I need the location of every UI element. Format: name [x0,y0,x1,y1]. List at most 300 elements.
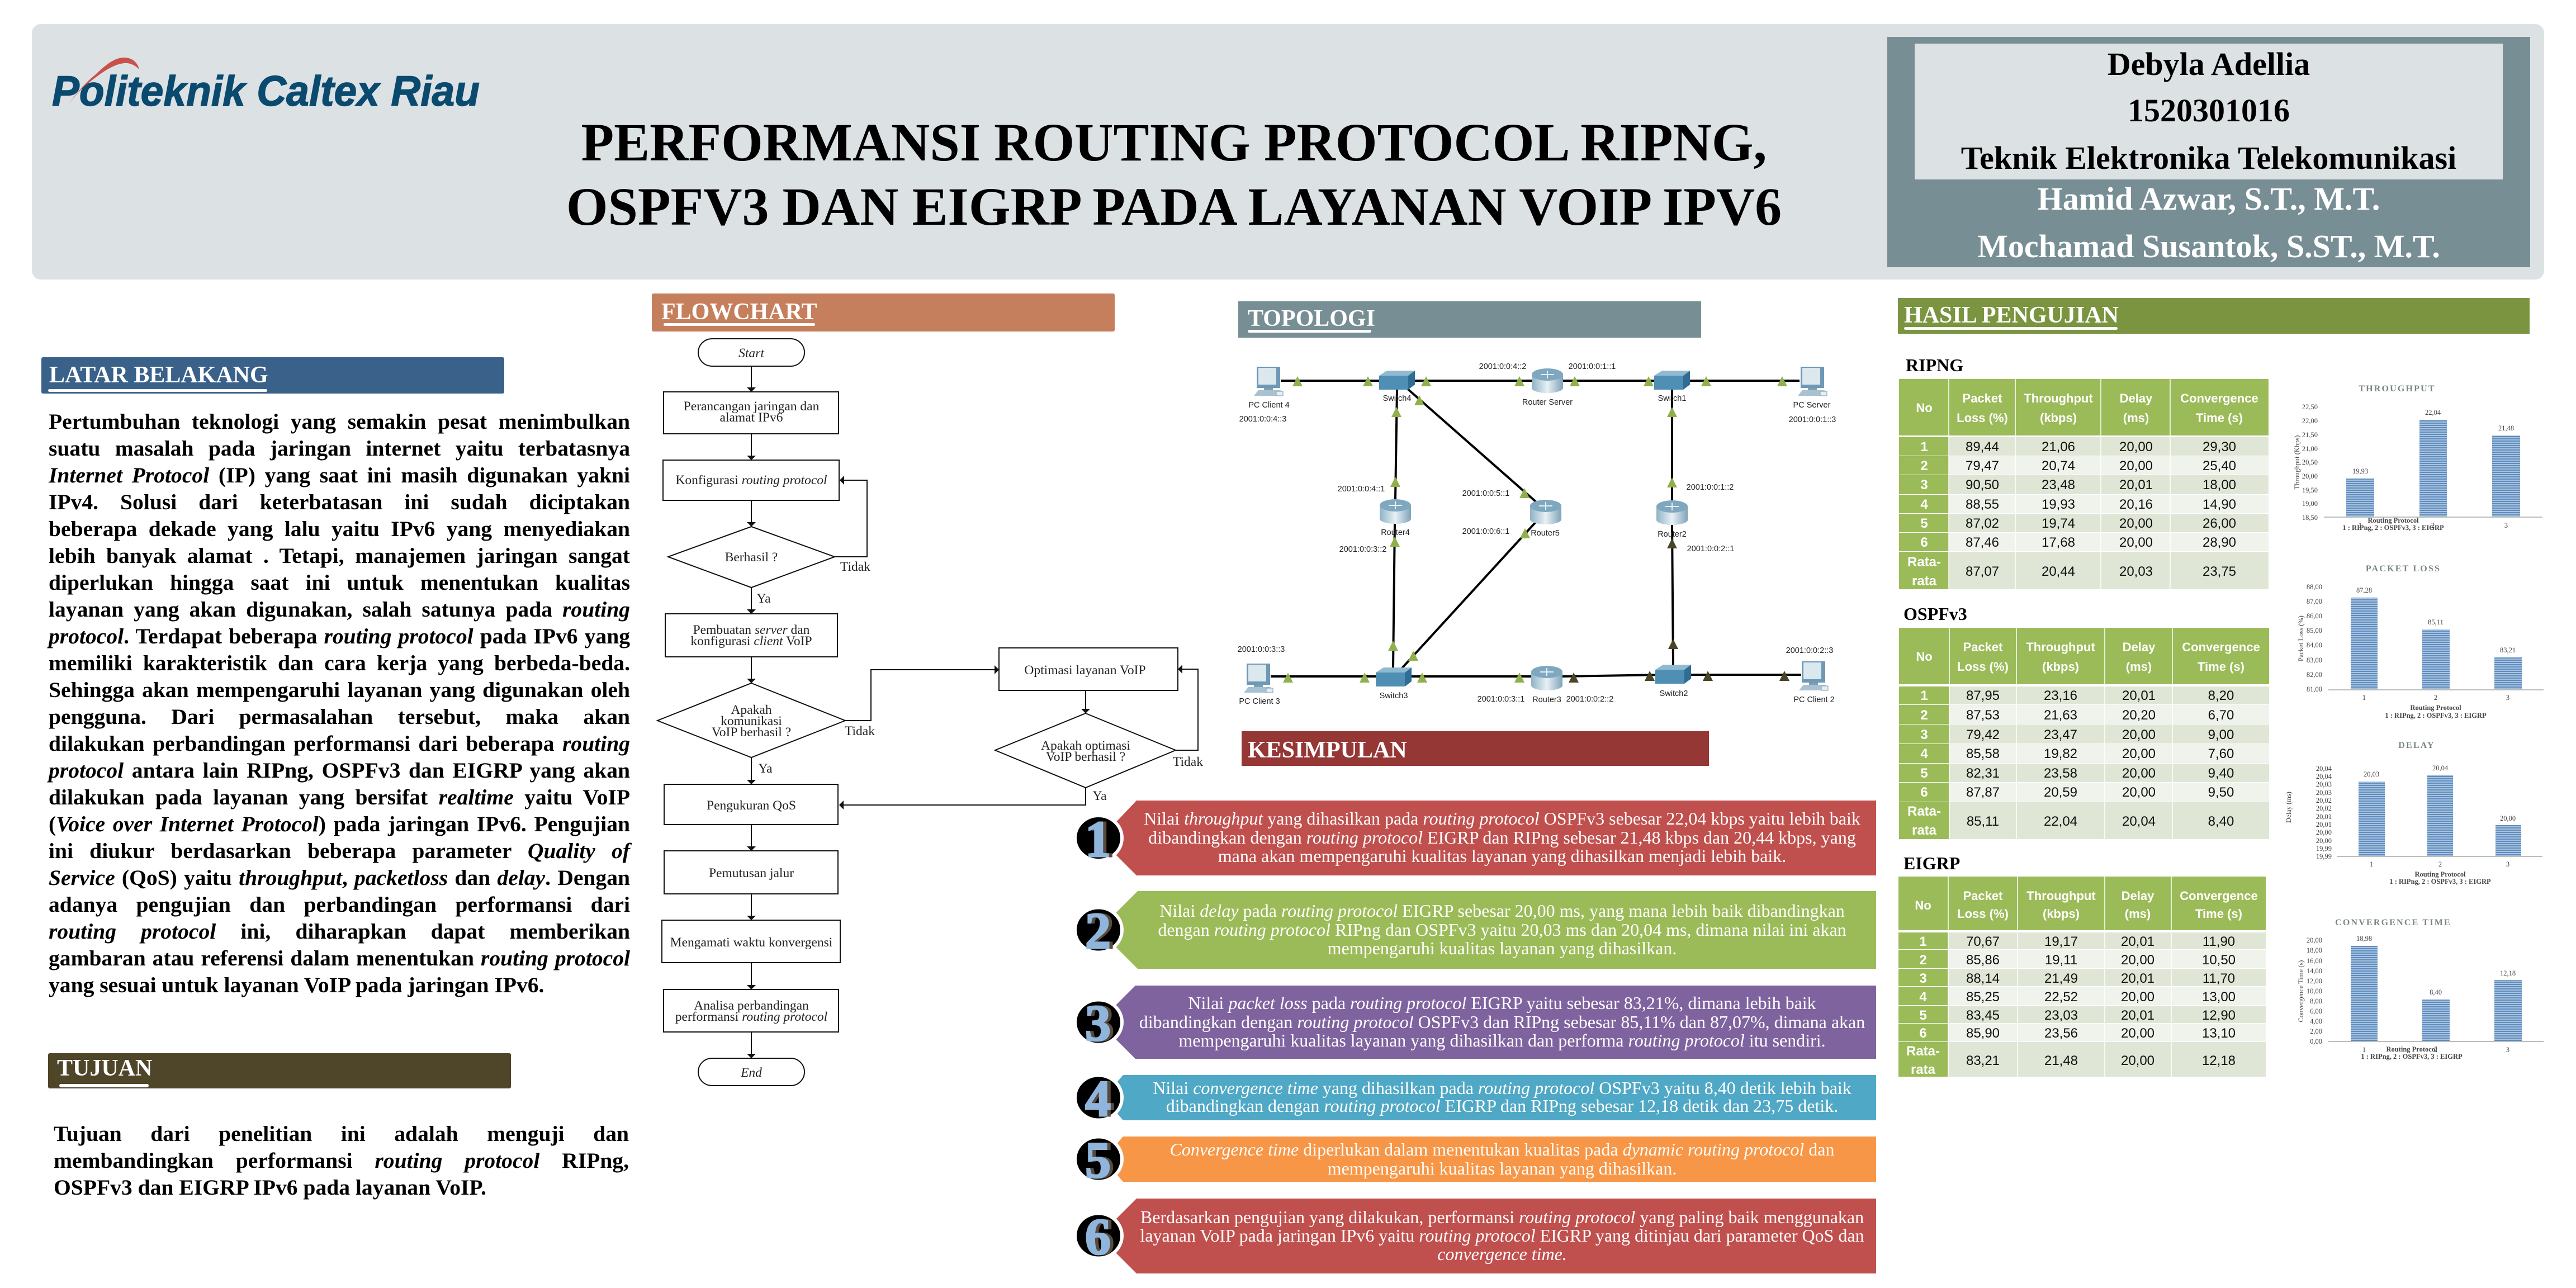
device and address labels: 2001:0:0:1::2 [1687,483,1734,492]
text block: latar belakang: lebih banyak alamat . Tetapi, manajemen jaringan sangat [49,543,630,568]
y axis ticks: 6,00 [2310,1007,2322,1015]
conclusion 5: mempengaruhi kualitas layanan yang dihasilkan. [1328,1158,1677,1178]
x axis [2328,689,2544,690]
table text: 87,07 [1966,564,1999,579]
table text: Time (s) [2198,660,2244,674]
table text: Time (s) [2196,411,2243,425]
y axis ticks: 88,00 [2307,583,2322,591]
arrow: mengamati to analisa [751,963,752,985]
arrow: optimasi to decision [1085,690,1086,709]
x labels and axis caption: 2 [2434,694,2437,702]
value labels [2364,764,2516,822]
conclusion 6: 6 [1085,1208,1111,1265]
author and supervisor names: Hamid Azwar, S.T., M.T. [2038,181,2380,217]
conclusion 5: 5 [1085,1131,1111,1188]
conclusion 4: 4 [1085,1070,1111,1127]
table text: 87,02 [1966,516,1999,531]
y axis ticks: 19,50 [2302,486,2318,494]
author and supervisor names: Debyla Adellia [2108,46,2310,82]
table title: EIGRP [1903,853,1960,873]
value labels: 20,03 [2364,770,2379,778]
value labels: 22,04 [2425,409,2441,416]
table text: 20,00 [2121,1026,2154,1041]
table text: 17,68 [2042,535,2075,550]
device and address labels: Switch4 [1383,394,1411,403]
value labels: 18,98 [2356,935,2372,943]
table text: rata [1912,823,1937,838]
table text: 18,00 [2203,477,2236,493]
chart title: DELAY [2398,741,2435,750]
node: pemutusan jalur: Pemutusan jalur [709,866,794,880]
table text: 6,70 [2208,708,2234,723]
table text: 20,01 [2122,688,2156,703]
bars [2346,420,2520,517]
table text [1907,640,2260,838]
table text: (ms) [2125,907,2151,921]
arrow: qos to pemutusan [751,825,752,846]
table text: 20,00 [2119,439,2153,454]
device and address labels: Switch2 [1660,689,1688,698]
arrow: ya to pengukuran [751,757,752,780]
heading: tujuan: TUJUAN [57,1055,152,1081]
table text: 87,95 [1966,688,2000,703]
table text: 85,25 [1966,989,2000,1005]
arrow: ya to server setup [751,588,752,609]
table text: Rata- [1907,555,1941,570]
table text: 1 [1919,934,1927,949]
table text: 70,67 [1966,934,2000,949]
x axis [2337,856,2542,857]
decision: berhasil [668,527,835,588]
table text: 9,00 [2208,727,2234,742]
x labels and axis caption [2342,517,2508,532]
x axis [2328,1041,2544,1042]
conclusion 6: Berdasarkan pengujian yang dilakukan, performansi routing protocol yang paling baik menggunakan [1140,1207,1864,1227]
device and address labels: Switch1 [1658,394,1686,403]
node: konfigurasi routing protocol [663,460,839,500]
node: analisa perbandingan [664,989,839,1032]
table text: rata [1911,1062,1936,1077]
table text: 85,58 [1966,746,2000,761]
arrow: tidak loop to optimasi [1176,669,1198,750]
conclusion 4 [1075,1070,1876,1127]
device and address labels: PC Client 4 [1248,401,1290,410]
table text: Loss (%) [1957,411,2008,425]
y axis ticks: 20,00 [2316,828,2332,836]
y axis ticks: 22,50 [2302,403,2318,411]
table text: Packet [1963,889,2003,903]
table text: Loss (%) [1957,907,2009,921]
node: analisa perbandingan: performansi routing protocol [675,1010,828,1024]
network topology diagram [1238,362,1836,706]
label: tidak: Tidak [845,724,875,738]
text block: tujuan [54,1121,629,1200]
y axis title: Throughput (Kbps) [2293,435,2301,489]
conclusion 5: Convergence time diperlukan dalam menentukan kualitas pada dynamic routing protocol dan [1170,1139,1834,1159]
conclusion ribbons [1075,801,1876,1273]
table text: 20,03 [2119,564,2153,579]
node: pembuatan server [665,614,837,657]
decision: optimasi voip berhasil [995,713,1176,788]
table text: Throughput [2026,889,2096,903]
device and address labels [1238,362,1836,706]
y axis ticks: 19,00 [2302,500,2318,508]
chart title: PACKET LOSS [2366,564,2441,574]
table text: 3 [1920,727,1928,742]
node: pembuatan server: konfigurasi client VoIP [690,634,812,648]
table text: 26,00 [2203,516,2236,531]
table text: 2 [1919,953,1927,968]
table text: 2 [1920,458,1928,473]
table text: Rata- [1906,1044,1940,1059]
chart title: CONVERGENCE TIME [2335,918,2451,927]
table text: 85,90 [1966,1026,2000,1041]
arrow: pemutusan to mengamati [751,894,752,916]
table text: 20,00 [2121,989,2154,1005]
y axis ticks: 84,00 [2307,641,2322,649]
text block: tujuan: membandingkan performansi routing protocol RIPng, [54,1148,629,1173]
table text: 20,44 [2042,564,2075,579]
text block: latar belakang: yang sesuai untuk layanan VoIP pada jaringan IPv6. [49,973,544,997]
device and address labels: 2001:0:0:4::3 [1239,415,1286,424]
arrow: start to design [751,366,752,387]
conclusion 2: mempengaruhi kualitas layanan yang dihasilkan. [1328,938,1677,958]
table text: 29,30 [2203,439,2236,454]
table text: 20,00 [2122,727,2156,742]
author inner panel [1915,44,2503,179]
table text: 89,44 [1966,439,1999,454]
conclusion 1: mana akan mempengaruhi kualitas layanan yang dihasilkan menjadi lebih baik. [1218,846,1786,866]
header panel [32,24,2544,280]
chart: delay [2285,741,2542,886]
y axis ticks: 20,03 [2316,780,2332,788]
x labels and axis caption: 1 : RIPng, 2 : OSPFv3, 3 : EIGRP [2385,712,2487,719]
conclusion 4: 4 [1088,1070,1114,1127]
x labels and axis caption [2370,860,2509,886]
node: start [698,339,804,366]
table: EIGRP [1898,853,2266,1077]
device and address labels: 2001:0:0:1::1 [1569,362,1616,371]
table text: Convergence [2180,391,2258,405]
decision: optimasi voip berhasil: VoIP berhasil ? [1046,750,1125,764]
table text: Delay [2120,391,2153,405]
device and address labels: PC Client 2 [1793,695,1835,704]
table text: 13,10 [2202,1026,2236,1041]
text block: latar belakang: routing protocol ini, diharapkan dapat memberikan [49,919,630,944]
table text: 5 [1920,766,1928,781]
value labels: 19,93 [2352,467,2368,475]
device icons [1244,367,1828,693]
conclusion 3: 3 [1088,995,1114,1052]
text block: latar belakang: adanya pengujian dan perbandingan performansi dari [49,892,630,917]
table text: 21,63 [2044,708,2077,723]
table text: 14,90 [2203,497,2236,512]
x labels and axis caption: 2 [2434,1046,2437,1054]
table text [1907,391,2258,589]
decision: komunikasi voip berhasil: komunikasi [721,714,782,728]
table text: 20,00 [2122,766,2156,781]
node: mengamati waktu konvergensi: Mengamati waktu konvergensi [670,935,833,950]
table text: 3 [1920,477,1928,493]
y axis ticks: 85,00 [2307,627,2322,634]
table text: Convergence [2180,889,2258,903]
conclusion 3: Nilai packet loss pada routing protocol EIGRP yaitu sebesar 83,21%, dimana lebih baik [1188,993,1816,1013]
table text: 85,86 [1966,953,2000,968]
device and address labels: 2001:0:0:3::3 [1238,645,1285,654]
table text: Throughput [2026,640,2095,654]
table text: No [1916,401,1933,415]
y axis ticks: 2,00 [2310,1027,2322,1035]
y axis ticks: 10,00 [2307,987,2322,995]
arrow: design to configuration [751,434,752,456]
x labels and axis caption: 1 : RIPng, 2 : OSPFv3, 3 : EIGRP [2361,1053,2463,1060]
conclusion 6: 6 [1088,1208,1114,1265]
heading: topologi [1238,301,1701,338]
table text: 23,47 [2044,727,2077,742]
table text: 79,47 [1966,458,1999,473]
author and supervisor names: Teknik Elektronika Telekomunikasi [1961,140,2456,176]
device and address labels: 2001:0:0:2::3 [1786,646,1833,655]
y axis ticks: 4,00 [2310,1017,2322,1025]
table text: 19,74 [2042,516,2075,531]
heading: topologi: TOPOLOGI [1248,306,1375,332]
table text: 23,75 [2203,564,2236,579]
table text: rata [1912,574,1937,589]
conclusion 6: convergence time. [1437,1244,1567,1264]
table text: 20,01 [2121,971,2154,986]
text block: latar belakang: gambaran atau referensi dalam menentukan routing protocol [49,946,630,970]
table text: 6 [1920,535,1928,550]
node: perancangan jaringan: Perancangan jaringan dan [684,399,820,414]
y axis ticks: 20,04 [2316,773,2332,780]
flowchart [657,339,1203,1086]
y axis ticks: 20,01 [2316,821,2332,828]
y axis ticks: 21,50 [2302,431,2318,439]
conclusion 3: dibandingkan dengan routing protocol OSPFv3 dan RIPng sebesar 85,11% dan 87,07%, dimana akan [1139,1012,1865,1032]
table text: 4 [1920,497,1928,512]
device and address labels: PC Client 3 [1239,697,1280,706]
y axis ticks: 16,00 [2307,957,2322,965]
table text: 20,01 [2119,477,2153,493]
node: optimasi layanan voip: Optimasi layanan VoIP [1024,663,1146,678]
table text: (kbps) [2042,660,2079,674]
table text: 87,46 [1966,535,1999,550]
text block: latar belakang: Pertumbuhan teknologi yang semakin pesat menimbulkan [49,409,630,434]
y axis ticks: 20,00 [2302,472,2318,480]
value labels [2352,409,2514,475]
arrowheads [747,387,1182,1058]
y axis ticks: 0,00 [2310,1038,2322,1045]
node: optimasi layanan voip [999,648,1178,690]
decision: komunikasi voip berhasil [657,683,845,757]
table text: 20,16 [2119,497,2153,512]
device and address labels: Router3 [1532,695,1561,704]
x labels and axis caption: 1 [2359,522,2362,529]
value labels: 12,18 [2500,969,2516,977]
table title: OSPFv3 [1903,604,1967,624]
y axis ticks: 86,00 [2307,612,2322,620]
table text: 83,45 [1966,1008,2000,1023]
value labels: 8,40 [2430,988,2442,996]
table text: 6 [1919,1026,1927,1041]
table text: 11,70 [2203,971,2235,986]
table text: 19,82 [2044,746,2077,761]
text block: latar belakang: pengguna. Dari permasalahan tersebut, maka akan [49,704,630,729]
y axis title: Packet Loss (%) [2297,615,2305,661]
table text: 20,00 [2121,953,2154,968]
text block: latar belakang: (Voice over Internet Protocol) pada jaringan IPv6. Pengujian [49,812,630,836]
value labels: 87,28 [2356,586,2372,594]
device and address labels: 2001:0:0:2::2 [1566,695,1613,704]
y axis ticks [2307,583,2322,693]
text block: tujuan: OSPFv3 dan EIGRP IPv6 pada layanan VoIP. [54,1175,486,1200]
table text: 5 [1920,516,1928,531]
chart: convergence time [2297,918,2544,1060]
conclusion 4: dibandingkan dengan routing protocol EIGRP dan RIPng sebesar 12,18 detik dan 23,75 detik. [1166,1096,1838,1116]
y axis ticks: 82,00 [2307,671,2322,679]
table text: 10,50 [2202,953,2236,968]
table text: 87,53 [1966,708,2000,723]
device and address labels: PC Server [1793,401,1831,410]
table text: Throughput [2024,391,2093,405]
table text: 20,00 [2122,785,2156,800]
table text: 2 [1920,708,1928,723]
conclusion 5 [1075,1131,1876,1188]
conclusion 3 [1075,986,1876,1059]
table text: Delay [2122,889,2154,903]
table text: 1 [1920,439,1928,454]
y axis ticks: 14,00 [2307,967,2322,975]
value labels: 83,21 [2500,646,2516,654]
y axis ticks: 20,03 [2316,789,2332,797]
arrow: tidak loop back [835,480,867,557]
table text: 20,04 [2122,814,2156,829]
table text: 23,16 [2044,688,2077,703]
arrow: server setup to decision [751,657,752,679]
table text: Loss (%) [1957,660,2009,674]
device and address labels: Router4 [1381,528,1410,537]
value labels: 21,48 [2498,424,2514,432]
y axis ticks: 12,00 [2307,977,2322,985]
table text: 12,90 [2202,1008,2236,1023]
text block: latar belakang: beberapa dekade yang lalu yaitu IPv6 yang menyediakan [49,517,630,541]
table text: 22,52 [2044,989,2078,1005]
y axis ticks: 20,01 [2316,813,2332,821]
text block: latar belakang: protocol. Terdapat beberapa routing protocol pada IPv6 yang [49,624,630,648]
author and supervisor names: Mochamad Susantok, S.ST., M.T. [1977,228,2440,264]
table text: Delay [2123,640,2156,654]
heading: kesimpulan [1242,731,1709,766]
table text: Time (s) [2195,907,2242,921]
conclusion 2: 2 [1085,902,1111,959]
table text: 88,55 [1966,497,1999,512]
table text: 7,60 [2208,746,2234,761]
table text: 23,48 [2042,477,2075,493]
heading: latar belakang [41,357,504,394]
label: ya: Ya [1092,789,1107,803]
device and address labels: 2001:0:0:3::1 [1478,695,1524,704]
conclusion 3: mempengaruhi kualitas layanan yang dihasilkan dan performa routing protocol itu sendiri. [1178,1030,1826,1050]
device and address labels: 2001:0:0:4::1 [1338,485,1385,494]
device and address labels: 2001:0:0:6::1 [1462,527,1509,536]
x labels and axis caption [2361,1045,2509,1060]
conclusion 4: Nilai convergence time yang dihasilkan pada routing protocol OSPFv3 yaitu 8,40 detik lebih baik [1153,1078,1852,1098]
table text: 13,00 [2202,989,2236,1005]
arrow: analisa to end [751,1032,752,1054]
table text: 87,87 [1966,785,2000,800]
x labels and axis caption: 1 [2370,860,2373,868]
table text: 21,06 [2042,439,2075,454]
table text: 20,01 [2121,934,2154,949]
y axis ticks: 20,50 [2302,458,2318,466]
table cells [1898,877,2266,1077]
text block: latar belakang: ini diukur berdasarkan beberapa parameter Quality of [49,839,630,863]
y axis ticks: 20,02 [2316,797,2332,804]
text block: latar belakang: diperlukan hingga saat ini untuk menentukan kualitas [49,570,630,595]
text block: latar belakang: Internet Protocol (IP) yang saat ini masih digunakan yakni [49,463,630,487]
decision: berhasil: Berhasil ? [725,550,778,565]
text block: latar belakang: Service (QoS) yaitu throughput, packetloss dan delay. Dengan [49,865,630,890]
value labels: 20,04 [2432,764,2449,772]
text block: latar belakang: suatu masalah pada jaringan internet yaitu terbatasnya [49,436,630,461]
y axis ticks: 20,04 [2316,765,2332,773]
table text: 20,59 [2044,785,2077,800]
device and address labels: Router Server [1522,398,1573,407]
table text: 3 [1919,971,1927,986]
table text: 23,03 [2044,1008,2078,1023]
label: ya: Ya [758,761,773,776]
node: konfigurasi routing protocol: Konfigurasi routing protocol [675,473,827,487]
title: PERFORMANSI ROUTING PROTOCOL RIPNG, [581,112,1767,172]
table text: 5 [1919,1008,1927,1023]
table text: No [1916,650,1933,664]
author and supervisor names: 1520301016 [2128,92,2290,129]
heading: flowchart: FLOWCHART [661,299,817,325]
y axis ticks: 21,00 [2302,445,2318,453]
table text: (kbps) [2043,907,2080,921]
table text: Packet [1963,640,2003,654]
x labels and axis caption: 1 [2362,694,2366,702]
conclusion 5: 5 [1088,1131,1114,1188]
x labels and axis caption: 2 [2438,860,2442,868]
x labels and axis caption: 3 [2504,522,2508,529]
x labels and axis caption: Routing Protocol [2367,517,2419,524]
y axis ticks: 8,00 [2310,997,2322,1005]
author and supervisor names [1961,46,2456,264]
arrow: ya to pengukuran qos [844,788,1086,805]
table text: 28,90 [2203,535,2236,550]
heading: latar belakang: LATAR BELAKANG [49,362,268,388]
text block: latar belakang [47,409,632,997]
table text: 90,50 [1966,477,1999,493]
conclusion 2: 2 [1088,902,1114,959]
title: OSPFV3 DAN EIGRP PADA LAYANAN VOIP IPV6 [566,177,1782,236]
table text: 20,00 [2121,1053,2154,1068]
y axis ticks: 20,00 [2307,936,2322,944]
node: pemutusan jalur [664,851,838,894]
y axis ticks: 20,02 [2316,804,2332,812]
node: end: End [740,1066,762,1080]
table text: 79,42 [1966,727,2000,742]
table text: 23,58 [2044,766,2077,781]
conclusion 1 [1075,801,1876,875]
conclusion 3: 3 [1085,995,1111,1052]
device and address labels: 2001:0:0:4::2 [1479,362,1526,371]
decision: komunikasi voip berhasil: Apakah [731,703,772,717]
x axis [2324,517,2542,518]
node: pengukuran qos: Pengukuran QoS [707,798,796,813]
value labels: 20,00 [2500,815,2516,822]
